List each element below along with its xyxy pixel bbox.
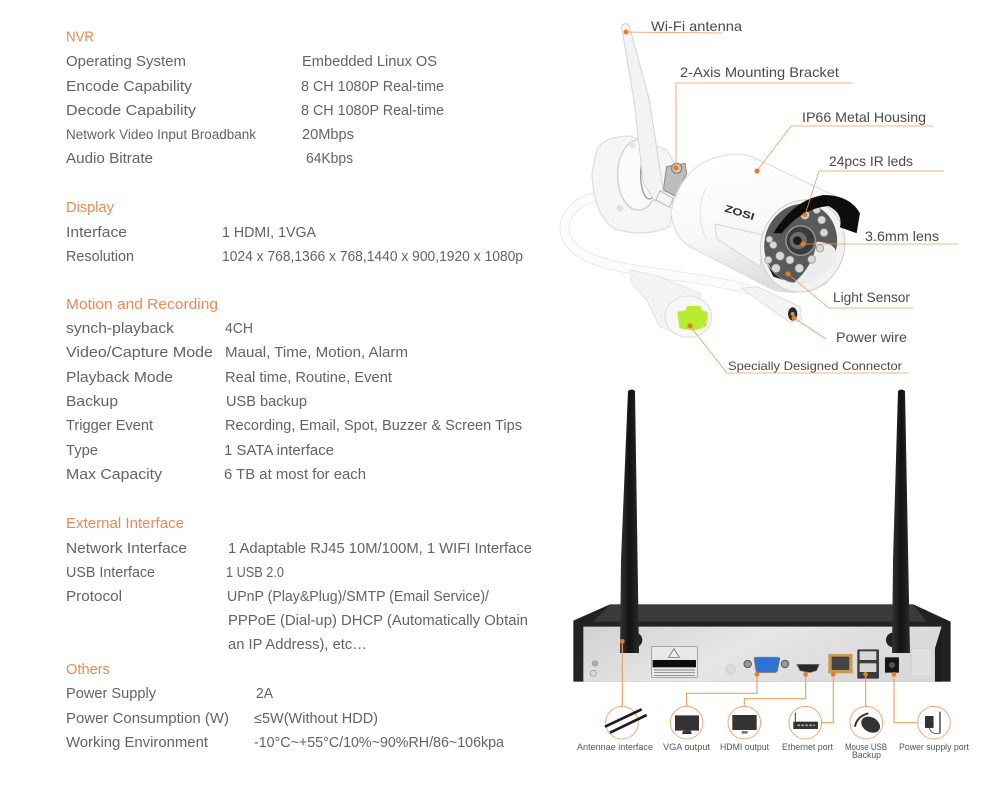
- label: mouse USB backup: Mouse USB: [845, 742, 887, 753]
- label: antennae interface: Antennae interface: [577, 742, 653, 753]
- row: encode capability: [66, 79, 444, 95]
- top cover: [573, 604, 951, 682]
- row: decode capability: Decode Capability: [66, 103, 197, 119]
- row: playback mode: Playback Mode: [66, 370, 173, 386]
- row: video capture mode: [66, 345, 408, 361]
- row: synch-playback: [66, 321, 253, 337]
- callout: connector: Specially Designed Connector: [728, 359, 902, 373]
- row: trigger event: [66, 418, 522, 434]
- LEDs: [765, 206, 828, 273]
- row: protocol: UPnP (Play&Plug)/SMTP (Email Service)/: [227, 589, 490, 605]
- power switch area: [912, 648, 932, 677]
- hood: [773, 195, 860, 233]
- lens face: [748, 188, 858, 304]
- USB ports: [857, 649, 879, 679]
- panel: display specifications: [66, 200, 523, 265]
- heading: external interface: External Interface: [66, 516, 184, 532]
- row: max capacity: 6 TB at most for each: [224, 467, 366, 483]
- row: operating system: [66, 54, 437, 70]
- panel: other specifications: [66, 662, 505, 751]
- row: synch-playback: synch-playback: [66, 321, 175, 337]
- row: operating system: Embedded Linux OS: [302, 54, 437, 70]
- row: network video input: [66, 127, 354, 143]
- label: Ethernet port: Ethernet port: [782, 742, 833, 753]
- row: power consumption: [66, 711, 378, 727]
- row: type: [66, 443, 334, 459]
- row: type: Type: [66, 443, 98, 459]
- line: VGA: [687, 672, 759, 706]
- callout: light sensor: [786, 272, 913, 308]
- row: trigger event: Trigger Event: [66, 418, 153, 434]
- row: playback mode: [66, 370, 392, 386]
- connector lines and icons: [605, 639, 950, 739]
- antenna: right: [892, 390, 910, 653]
- row: resolution: Resolution: [66, 249, 134, 265]
- row: decode capability: 8 CH 1080P Real-time: [301, 103, 444, 119]
- DC port: [885, 657, 899, 673]
- lens: [786, 226, 815, 255]
- row: protocol: Protocol: [66, 589, 122, 605]
- line: power: [892, 672, 918, 723]
- row: protocol: [66, 589, 528, 653]
- row: working environment: [66, 735, 505, 751]
- antenna: left: [620, 390, 639, 653]
- label: mouse USB backup: [845, 742, 887, 761]
- row: protocol: PPPoE (Dial-up) DHCP (Automatically Obtain: [228, 613, 528, 629]
- line: HDMI: [744, 672, 808, 706]
- row: interface: [66, 225, 316, 241]
- row: encode capability: Encode Capability: [66, 79, 193, 95]
- row: audio bitrate: [66, 151, 353, 167]
- power jack: [742, 287, 802, 323]
- antenna bases: [628, 633, 642, 647]
- icon: HDMI monitor: [728, 706, 761, 739]
- row: video capture mode: Video/Capture Mode: [66, 345, 213, 361]
- Ethernet port: [828, 654, 853, 673]
- heading: display: Display: [66, 200, 115, 216]
- callout: power wire: [792, 316, 907, 345]
- label: HDMI output: HDMI output: [720, 742, 769, 753]
- row: video capture mode: Maual, Time, Motion, Alarm: [225, 345, 408, 361]
- caution label: [652, 647, 697, 677]
- label: power supply port: Power supply port: [899, 742, 969, 753]
- antenna: [621, 24, 663, 202]
- row: backup: USB backup: [226, 394, 307, 410]
- row: power supply: Power Supply: [66, 686, 157, 702]
- callout: IR leds: 24pcs IR leds: [829, 153, 913, 169]
- row: power supply: 2A: [256, 686, 273, 702]
- row: trigger event: Recording, Email, Spot, Buzzer & Screen Tips: [225, 418, 522, 434]
- icon: power adapter: [918, 706, 950, 739]
- panel: external interface specifications: [66, 516, 532, 653]
- heading: motion and recording: Motion and Recording: [66, 297, 218, 313]
- icon: VGA monitor: [670, 706, 703, 739]
- housing: [671, 154, 845, 292]
- HDMI port: [797, 664, 819, 673]
- heading: NVR: NVR: [66, 30, 94, 46]
- icon: router: [789, 706, 822, 739]
- row: max capacity: [66, 467, 366, 483]
- row: resolution: 1024 x 768,1366 x 768,1440 x 900,1920 x 1080p: [222, 249, 523, 265]
- line: mouse USB: [863, 672, 868, 706]
- row: audio bitrate: 64Kbps: [306, 151, 353, 167]
- panel: NVR specifications: [66, 30, 444, 167]
- cable: [565, 197, 750, 290]
- brand: ZOSI: ZOSI: [723, 204, 756, 223]
- illustration: NVR recorder: [573, 604, 951, 682]
- row: usb interface: [66, 565, 284, 581]
- row: network video input: Network Video Input Broadbank: [66, 127, 256, 142]
- row: max capacity: Max Capacity: [66, 467, 163, 483]
- row: type: 1 SATA interface: [224, 443, 334, 459]
- row: backup: [66, 394, 307, 410]
- VGA port: [744, 660, 751, 668]
- row: network interface: 1 Adaptable RJ45 10M/100M, 1 WIFI Interface: [228, 541, 532, 557]
- row: power consumption: ≤5W(Without HDD): [254, 711, 378, 727]
- callout: lens: [800, 228, 958, 246]
- mount plate: [592, 136, 677, 233]
- row: backup: Backup: [66, 394, 118, 410]
- callout: metal housing: [754, 109, 933, 174]
- row: network interface: [66, 541, 532, 557]
- rear plate: [583, 627, 942, 682]
- row: resolution: [66, 249, 523, 265]
- row: power supply: [66, 686, 273, 702]
- callout: connector: [688, 324, 908, 373]
- row: operating system: Operating System: [66, 54, 186, 70]
- callout: Wi-Fi antenna: Wi-Fi antenna: [651, 18, 742, 34]
- row: synch-playback: 4CH: [225, 321, 253, 337]
- row: network interface: Network Interface: [66, 541, 187, 557]
- row: network video input: 20Mbps: [302, 127, 354, 143]
- line: antenna interface: [620, 639, 625, 706]
- label: mouse USB backup: Backup: [852, 750, 881, 761]
- callout: light sensor: Light Sensor: [833, 289, 910, 305]
- row: working environment: Working Environment: [66, 735, 208, 751]
- row: interface: 1 HDMI, 1VGA: [222, 225, 316, 241]
- illustration: bullet camera: [565, 24, 860, 337]
- row: usb interface: USB Interface: [66, 565, 155, 581]
- callout: power wire: Power wire: [836, 329, 907, 345]
- row: protocol: an IP Address), etc…: [228, 637, 367, 653]
- audio out: [726, 665, 735, 674]
- row: decode capability: [66, 103, 444, 119]
- row: working environment: -10°C~+55°C/10%~90%RH/86~106kpa: [254, 735, 505, 751]
- callout: mounting bracket: 2-Axis Mounting Bracket: [680, 64, 839, 80]
- heading: others: Others: [66, 662, 110, 678]
- row: power consumption: Power Consumption (W): [66, 711, 229, 727]
- callout: lens: 3.6mm lens: [865, 228, 939, 244]
- row: encode capability: 8 CH 1080P Real-time: [301, 79, 444, 95]
- icon: antennae: [605, 706, 647, 739]
- label: VGA output: VGA output: [663, 742, 710, 753]
- callout: mounting bracket: [674, 64, 852, 170]
- row: audio bitrate: Audio Bitrate: [66, 151, 153, 167]
- connector: [630, 270, 707, 337]
- bracket: [663, 163, 687, 197]
- icon: mouse: [850, 706, 883, 739]
- row: interface: Interface: [66, 225, 127, 241]
- line: Ethernet: [822, 672, 836, 723]
- callout: metal housing: IP66 Metal Housing: [802, 109, 926, 125]
- panel: motion and recording specifications: [66, 297, 522, 483]
- row: playback mode: Real time, Routine, Event: [225, 370, 392, 386]
- row: usb interface: 1 USB 2.0: [226, 565, 284, 581]
- ground screw: [592, 660, 598, 667]
- callout: IR leds: [802, 153, 944, 218]
